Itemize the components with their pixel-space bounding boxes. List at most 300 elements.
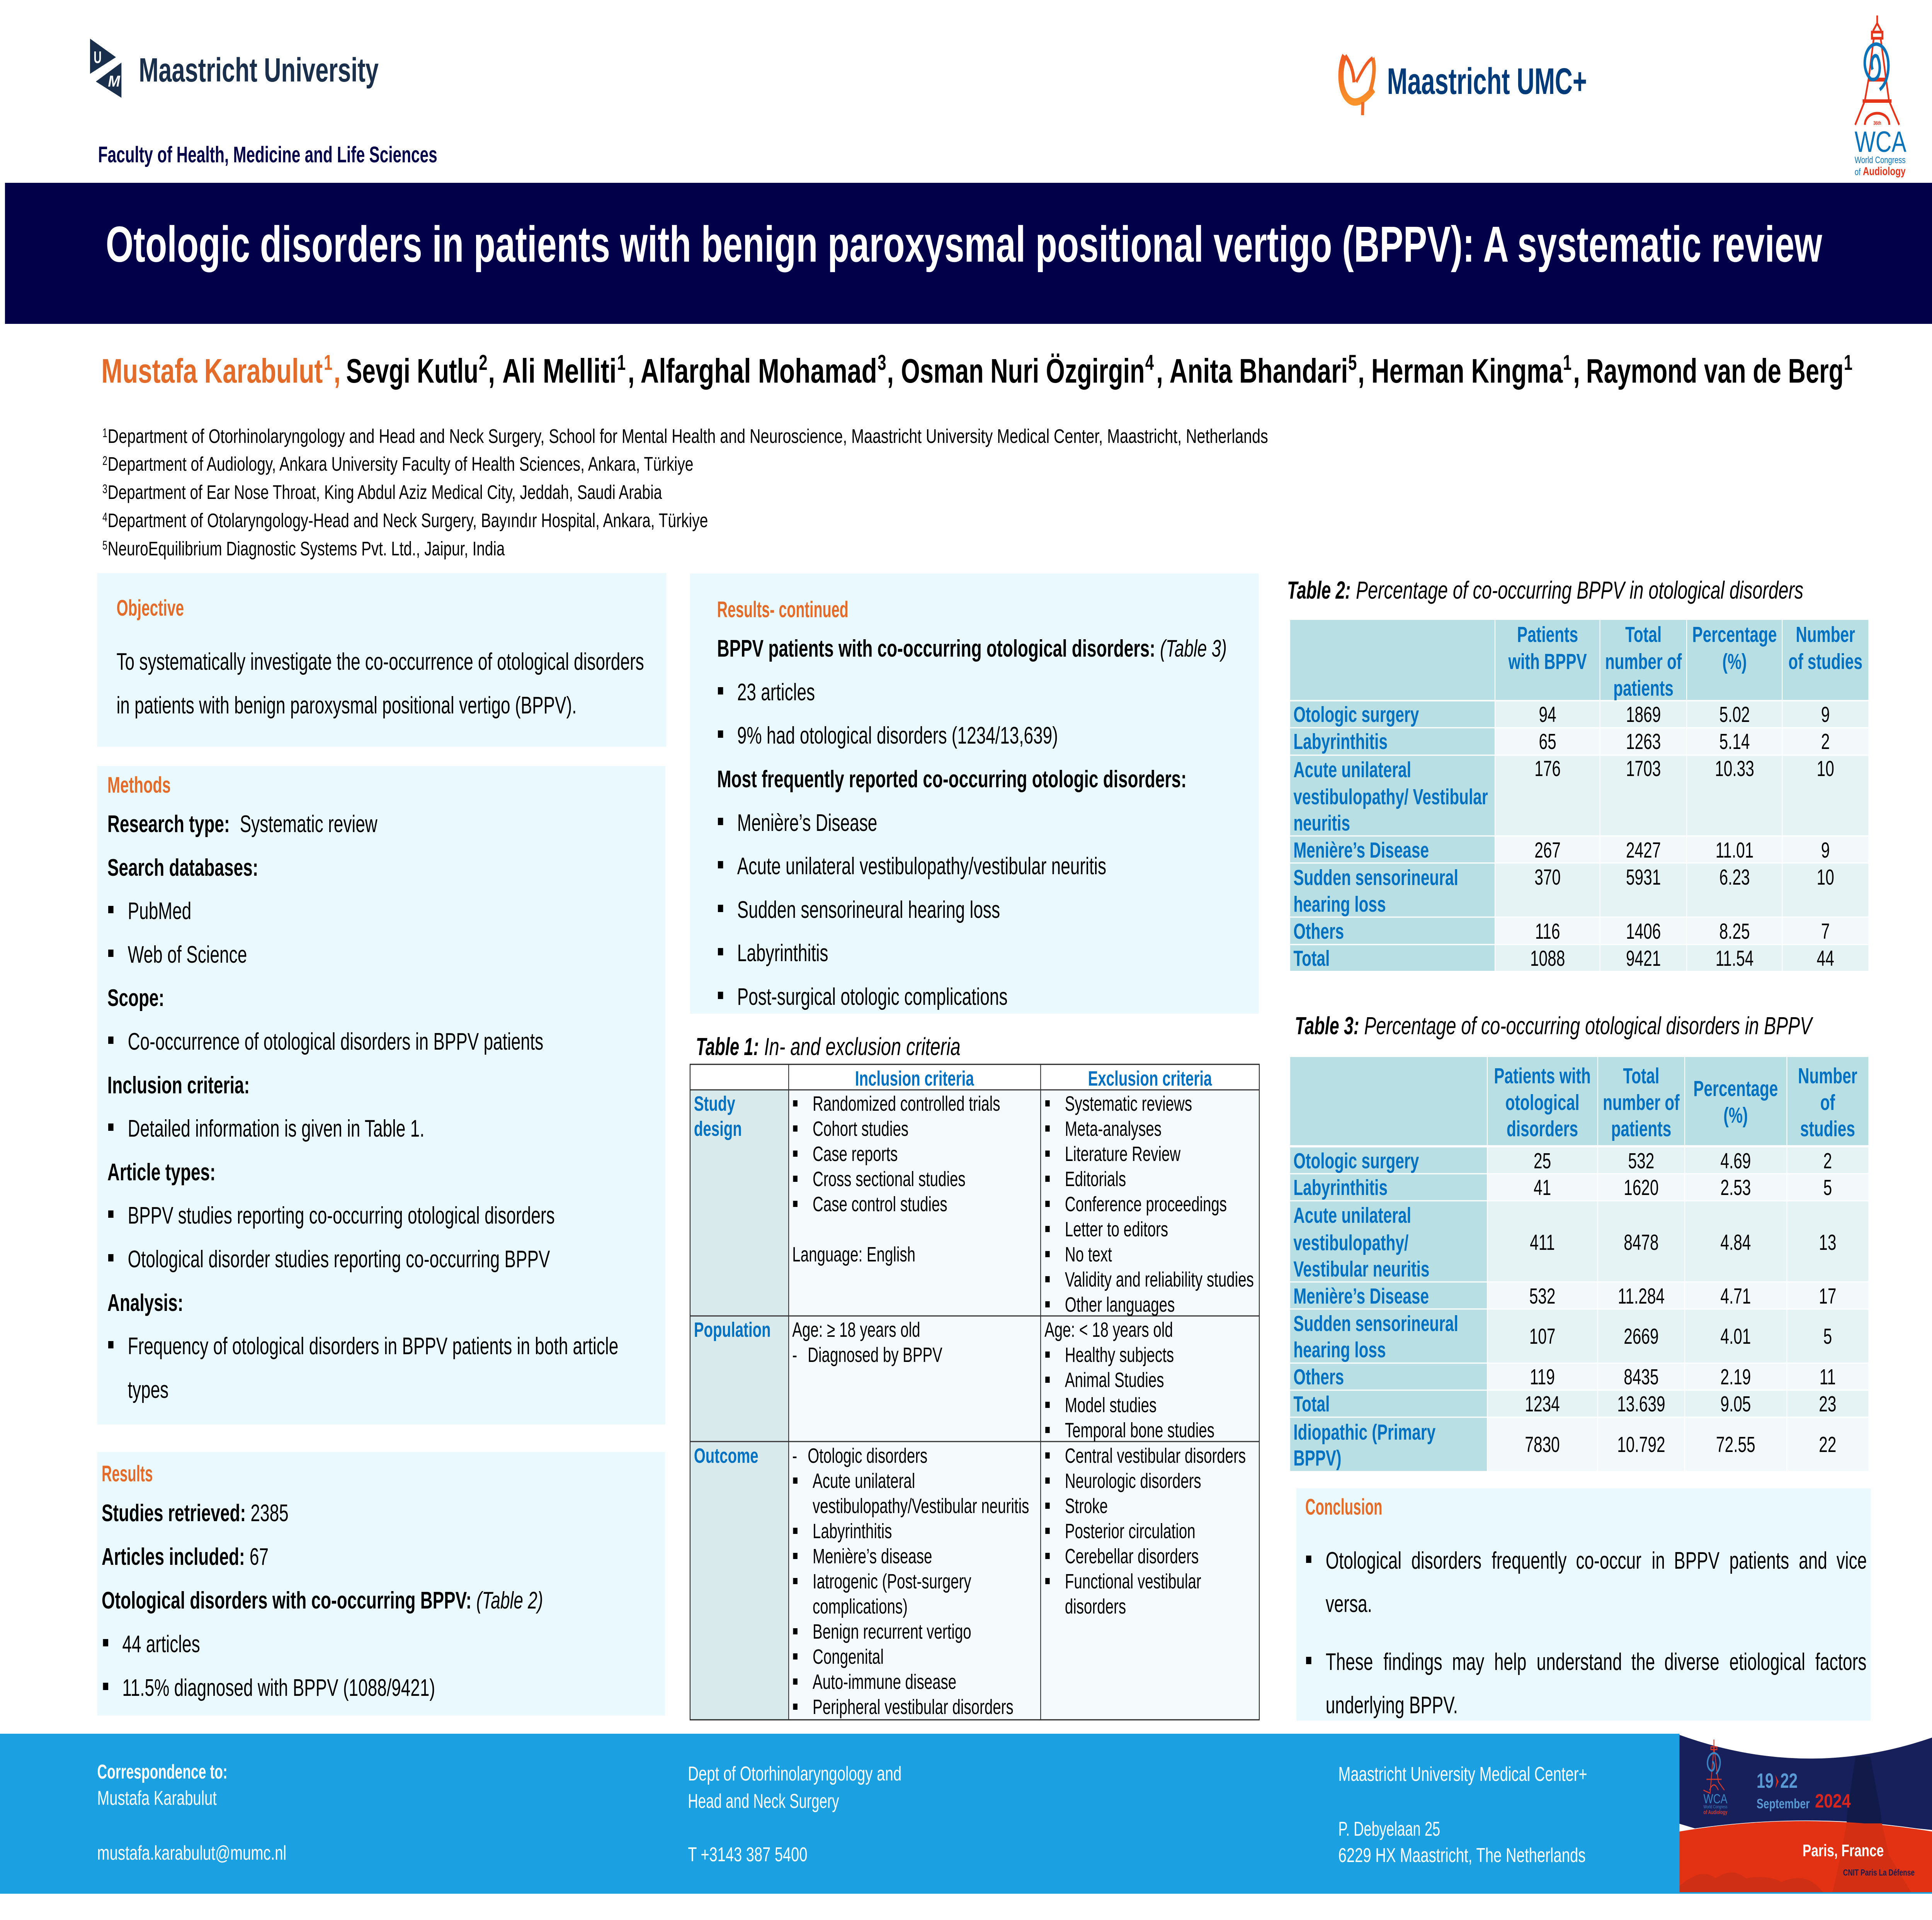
table 1 row: study design: Meta-analyses <box>1065 1117 1162 1140</box>
table 1 row: study design: Study <box>694 1092 735 1115</box>
table 2 header: Total <box>1625 622 1662 647</box>
table 2 rows: 2427 <box>1626 838 1661 863</box>
text: methods list: Research type: <box>107 811 230 837</box>
table 1 row: outcome: Posterior circulation <box>1065 1520 1196 1543</box>
text: methods list: PubMed <box>128 898 191 924</box>
table 1 row: study design: Literature Review <box>1065 1142 1180 1166</box>
table 2 rows: 8.25 <box>1719 919 1750 944</box>
table 2 rows: 176 <box>1534 756 1561 781</box>
text: results list: 11.5% diagnosed with BPPV (1088/9421) <box>122 1675 435 1701</box>
footer: correspondence <box>97 1760 286 1864</box>
table 1 row: outcome: Otologic disorders <box>808 1444 927 1467</box>
authors: Anita Bhandari <box>1170 352 1348 390</box>
table 2 rows: 65 <box>1539 729 1556 754</box>
affiliations: 5 <box>102 538 107 552</box>
authors: Alfarghal Mohamad <box>641 352 877 390</box>
table 1 row: outcome: Auto-immune disease <box>813 1670 956 1694</box>
footer: correspondence: Mustafa Karabulut <box>97 1787 217 1809</box>
table 2 rows: 9 <box>1821 702 1830 727</box>
table 2 rows: 7 <box>1821 919 1830 944</box>
table 1 header row: Inclusion criteria <box>855 1067 974 1090</box>
table 3 rows: Acute unilateral <box>1293 1203 1411 1228</box>
text: results list <box>102 1500 543 1701</box>
table 3 rows: 8435 <box>1624 1365 1659 1389</box>
text: results continued list: Post-surgical otologic complications <box>737 984 1008 1010</box>
text: results list: Otological disorders with co-occurring BPPV: (Table 2) <box>102 1587 543 1614</box>
mini logo: WCA <box>1703 1740 1728 1815</box>
text: conclusion bullets: frequently <box>1492 1547 1567 1574</box>
table 3 rows: Others <box>1293 1365 1344 1389</box>
text: conclusion bullets: the <box>1631 1649 1655 1675</box>
table 2 rows: vestibulopathy/ Vestibular <box>1293 785 1488 809</box>
text: results list: Studies retrieved: 2385 <box>102 1500 289 1527</box>
table 2 rows: Otologic surgery <box>1293 702 1419 727</box>
table 2 rows: neuritis <box>1293 811 1350 836</box>
table 1 row: study design: design <box>694 1117 742 1140</box>
table 3 header: Percentage <box>1693 1076 1778 1101</box>
table 2 header: of studies <box>1788 649 1862 674</box>
table 3 header: number of <box>1603 1090 1680 1115</box>
table 1 row: study design: Validity and reliability studies <box>1065 1268 1254 1291</box>
table 1 row: outcome: Labyrinthitis <box>813 1520 892 1543</box>
panel: objective <box>97 573 667 747</box>
text: conclusion bullets: diverse <box>1664 1649 1719 1675</box>
table 1 header row: Exclusion criteria <box>1088 1067 1212 1090</box>
table 3 rows: 25 <box>1534 1149 1551 1173</box>
authors: 2 <box>479 351 488 375</box>
table 3 header: Total <box>1623 1064 1659 1088</box>
table 1 row: outcome: complications) <box>813 1595 908 1618</box>
text: conclusion bullets: findings <box>1383 1649 1442 1675</box>
table 1 row: study design <box>694 1092 1254 1316</box>
table 2 header: (%) <box>1722 649 1747 674</box>
table 2 header <box>1508 622 1862 701</box>
authors: , <box>628 352 634 390</box>
congress location: CNIT Paris La Défense <box>1843 1868 1915 1878</box>
table 2: co-occurring BPPV in otological disorders <box>1290 620 1868 971</box>
table 3 header: (%) <box>1723 1103 1748 1128</box>
table 2 header: patients <box>1613 676 1673 701</box>
table 3 rows: Otologic surgery <box>1293 1149 1419 1173</box>
table 3 rows: 2.53 <box>1720 1175 1751 1200</box>
table 1 row: study design: Randomized controlled trials <box>813 1092 1000 1115</box>
table 2 rows: 94 <box>1539 702 1556 727</box>
table 1 row: population: Animal Studies <box>1065 1369 1164 1392</box>
table 3 header: of <box>1820 1090 1835 1115</box>
text: conclusion bullets: BPPV <box>1674 1547 1719 1574</box>
table 1 row: population: Population <box>694 1318 771 1341</box>
panel: conclusion <box>1296 1488 1871 1721</box>
text: results continued list: Menière’s Disease <box>737 810 877 836</box>
text: conclusion bullets: disorders <box>1411 1547 1481 1574</box>
footer: department: Dept of Otorhinolaryngology and <box>688 1762 901 1785</box>
footer: address: 6229 HX Maastricht, The Netherlands <box>1338 1844 1585 1867</box>
table 3 rows: 5 <box>1823 1175 1832 1200</box>
table 1: inclusion and exclusion criteria <box>690 1064 1259 1720</box>
table 2 caption: Table 2: <box>1287 576 1351 604</box>
text: conclusion bullets: factors <box>1815 1649 1866 1675</box>
text: results continued list <box>717 635 1227 1010</box>
table 1 row: outcome: vestibulopathy/Vestibular neuritis <box>813 1494 1029 1518</box>
logo: Maastricht University: U <box>94 48 102 67</box>
table 1 row: outcome: Congenital <box>813 1645 884 1668</box>
table 2 rows: 116 <box>1535 919 1560 944</box>
table 3 rows <box>1293 1149 1836 1471</box>
table 3 rows: 72.55 <box>1716 1432 1755 1457</box>
table 2 rows: 1703 <box>1626 756 1661 781</box>
authors: 1 <box>1563 351 1571 375</box>
text: results continued list: 23 articles <box>737 679 815 706</box>
table 1 row: outcome: Peripheral vestibular disorders <box>813 1695 1014 1719</box>
text: conclusion bullets: co-occur <box>1576 1547 1641 1574</box>
logo: World Congress of Audiology: Audiology <box>1863 164 1906 178</box>
table 2 rows: hearing loss <box>1293 892 1386 917</box>
table 1 row: study design: Editorials <box>1065 1168 1126 1191</box>
table 3 rows: 4.01 <box>1720 1324 1751 1349</box>
table 1 row: outcome: Central vestibular disorders <box>1065 1444 1246 1467</box>
table 3 rows: 17 <box>1819 1284 1836 1309</box>
authors <box>101 351 1852 390</box>
table 3 rows: 119 <box>1530 1365 1555 1389</box>
logo: Maastricht University <box>90 39 379 98</box>
table 3 rows: 2.19 <box>1720 1365 1751 1389</box>
table 1 row: population: Age: < 18 years old <box>1044 1318 1173 1341</box>
heading: objective: Objective <box>116 595 184 621</box>
table 1 row: study design: Other languages <box>1065 1293 1175 1316</box>
authors: 1 <box>1844 351 1852 375</box>
table 2 rows: Sudden sensorineural <box>1293 865 1458 890</box>
table 2 rows: 44 <box>1817 946 1834 971</box>
logo: Maastricht University: Maastricht University <box>139 52 379 89</box>
logo: World Congress of Audiology: WCA <box>1855 125 1906 158</box>
table 2 rows: 9421 <box>1626 946 1661 971</box>
table 1 row: outcome: Stroke <box>1065 1494 1108 1518</box>
text: methods list: Otological disorder studies reporting co-occurring BPPV <box>128 1246 550 1273</box>
table 2 rows: 10.33 <box>1715 756 1754 781</box>
table 2 header: Patients <box>1517 622 1578 647</box>
title banner <box>5 183 1932 324</box>
table 2 rows: 5931 <box>1626 865 1661 890</box>
table 2 rows: 6.23 <box>1719 865 1750 890</box>
affiliations: 1 <box>102 426 107 440</box>
logo: World Congress of Audiology: 36th <box>1873 120 1881 126</box>
authors: Sevgi Kutlu <box>346 352 478 390</box>
authors: , <box>334 352 340 390</box>
text: conclusion bullets: vice <box>1837 1547 1867 1574</box>
table 2 rows: 11.54 <box>1716 946 1753 971</box>
authors: Raymond van de Berg <box>1586 352 1844 390</box>
text: conclusion bullets: patients <box>1729 1547 1789 1574</box>
table 3: co-occurring otological disorders in BPPV <box>1290 1057 1868 1471</box>
table 3 rows: 11.284 <box>1618 1284 1665 1309</box>
congress location <box>1803 1841 1915 1878</box>
text: methods list: Web of Science <box>128 941 247 968</box>
affiliations <box>102 426 1268 560</box>
table 1 row: outcome: - <box>792 1444 797 1467</box>
table 3 rows: BPPV) <box>1293 1446 1341 1471</box>
text: methods list: Analysis: <box>107 1290 183 1316</box>
text: conclusion bullets: Otological <box>1326 1547 1401 1574</box>
table 1 row: population: Diagnosed by BPPV <box>808 1343 942 1367</box>
table 3 rows: 5 <box>1823 1324 1832 1349</box>
authors: , <box>1573 352 1580 390</box>
footer: department: T +3143 387 5400 <box>688 1843 808 1866</box>
authors: Mustafa Karabulut <box>101 352 323 390</box>
table 1 row: population: Temporal bone studies <box>1065 1419 1214 1442</box>
table 2 rows: 267 <box>1534 838 1561 863</box>
panel: methods <box>97 766 665 1425</box>
heading: methods: Methods <box>107 772 171 798</box>
table 3 rows: 1234 <box>1525 1392 1560 1416</box>
table 3 rows: 1620 <box>1624 1175 1659 1200</box>
table 3 rows: 41 <box>1534 1175 1551 1200</box>
mini logo: WCA: WCA <box>1703 1792 1728 1806</box>
authors: 1 <box>324 351 332 375</box>
congress dates: 19 <box>1757 1769 1774 1792</box>
table 2 rows: 370 <box>1534 865 1561 890</box>
table 1 caption: In- and exclusion criteria <box>764 1033 961 1060</box>
table 1 row: population <box>694 1318 1214 1442</box>
text: conclusion bullets <box>1306 1547 1867 1719</box>
footer: congress banner <box>1679 1734 1932 1892</box>
authors: , <box>488 352 495 390</box>
text: methods list: Inclusion criteria: <box>107 1072 250 1099</box>
table 2 rows: 1406 <box>1626 919 1661 944</box>
authors: , <box>1358 352 1365 390</box>
table 3 rows: Total <box>1293 1392 1330 1416</box>
table 3 rows: 9.05 <box>1720 1392 1751 1416</box>
affiliations: 4 <box>102 510 107 524</box>
table 3 header: Number <box>1798 1064 1857 1088</box>
table 1 row: study design: No text <box>1065 1243 1112 1266</box>
table 3 rows: Menière’s Disease <box>1293 1284 1429 1309</box>
affiliations: Department of Ear Nose Throat, King Abdul Aziz Medical City, Jeddah, Saudi Arabia <box>108 482 662 504</box>
text: methods list <box>107 811 618 1403</box>
table 3 rows: 22 <box>1819 1432 1836 1457</box>
table 1 caption: Table 1: <box>696 1033 759 1060</box>
faculty name: Faculty of Health, Medicine and Life Sciences <box>98 142 437 167</box>
table 2 header: Number <box>1796 622 1855 647</box>
table 3 caption: Table 3: <box>1295 1012 1359 1040</box>
text: conclusion bullets: versa. <box>1326 1591 1372 1617</box>
table 1 row: population: Model studies <box>1065 1394 1156 1417</box>
authors: 1 <box>617 351 626 375</box>
authors: 4 <box>1145 351 1154 375</box>
footer band <box>0 1734 1932 1894</box>
table 3 rows: 4.71 <box>1720 1284 1751 1309</box>
congress dates: September <box>1757 1796 1810 1811</box>
table 2 rows: 11.01 <box>1716 838 1753 863</box>
text: results continued list: 9% had otological disorders (1234/13,639) <box>737 722 1058 749</box>
footer: address <box>1338 1763 1587 1867</box>
text: conclusion bullets: These <box>1326 1649 1373 1675</box>
title banner: Otologic disorders in patients with benign paroxysmal positional vertigo (BPPV): A systematic review <box>106 216 1822 273</box>
affiliations: Department of Otolaryngology-Head and Neck Surgery, Bayındır Hospital, Ankara, Türkiye <box>108 510 708 532</box>
table 1 row: outcome: disorders <box>1065 1595 1126 1618</box>
text: results continued list: BPPV patients with co-occurring otological disorders: (Table 3) <box>717 635 1227 662</box>
logo: Maastricht University: M <box>108 72 121 90</box>
text: methods list: BPPV studies reporting co-occurring otological disorders <box>128 1202 555 1229</box>
table 3 rows: 13 <box>1819 1230 1836 1255</box>
table 3 rows: 23 <box>1819 1392 1836 1416</box>
table 1 row: outcome: Functional vestibular <box>1065 1570 1201 1593</box>
table 3 header: otological <box>1505 1090 1579 1115</box>
affiliations: Department of Audiology, Ankara University Faculty of Health Sciences, Ankara, Türkiye <box>108 453 693 475</box>
text: results list: Articles included: 67 <box>102 1544 269 1570</box>
table 3 rows: 2 <box>1823 1149 1832 1173</box>
table 2 rows: 5.14 <box>1719 729 1750 754</box>
table 2 header: Percentage <box>1692 622 1777 647</box>
affiliations: 3 <box>102 482 107 496</box>
text: conclusion bullets: understand <box>1537 1649 1622 1675</box>
congress location: Paris, France <box>1803 1841 1884 1860</box>
table 1 row: study design: Language: English <box>792 1243 915 1266</box>
text: conclusion bullets: and <box>1799 1547 1827 1574</box>
table 1 row: population: Age: ≥ 18 years old <box>792 1318 920 1341</box>
congress dates <box>1757 1769 1851 1812</box>
authors: Ali Melliti <box>502 352 617 390</box>
text: results continued list: Sudden sensorineural hearing loss <box>737 897 1000 923</box>
table 3 header: patients <box>1611 1117 1671 1141</box>
table 1 header row <box>855 1067 1212 1090</box>
table 1 row: population: - <box>792 1343 797 1367</box>
table 2 rows: 1869 <box>1626 702 1661 727</box>
heading: conclusion: Conclusion <box>1305 1494 1383 1520</box>
table 2 rows <box>1293 702 1834 971</box>
text: objective statement: in patients with benign paroxysmal positional vertigo (BPPV). <box>116 692 577 719</box>
footer: address: P. Debyelaan 25 <box>1338 1818 1440 1840</box>
congress dates: 2024 <box>1815 1791 1851 1812</box>
table 3 rows: Labyrinthitis <box>1293 1175 1388 1200</box>
table 3 rows: Idiopathic (Primary <box>1293 1420 1436 1445</box>
logo: World Congress of Audiology: of <box>1855 167 1861 177</box>
table 3 rows: 107 <box>1529 1324 1555 1349</box>
table 3 rows: 4.84 <box>1720 1230 1751 1255</box>
table 2 rows: Labyrinthitis <box>1293 729 1388 754</box>
text: results list: 44 articles <box>122 1631 200 1658</box>
authors: , <box>1156 352 1163 390</box>
table 2 rows: Total <box>1293 946 1330 971</box>
table 2 rows: Others <box>1293 919 1344 944</box>
table 1 row: outcome: Benign recurrent vertigo <box>813 1620 971 1643</box>
panel: results continued <box>690 574 1259 1014</box>
table 2 rows: 10 <box>1817 756 1834 781</box>
table 2 header: with BPPV <box>1508 649 1587 674</box>
table 2 rows: 5.02 <box>1719 702 1750 727</box>
table 1 row: study design: Case control studies <box>813 1193 947 1216</box>
table 3 header: studies <box>1800 1117 1855 1141</box>
table 1 row: study design: Cross sectional studies <box>813 1168 966 1191</box>
footer: correspondence: Correspondence to: <box>97 1760 228 1783</box>
table 2 rows: 10 <box>1817 865 1834 890</box>
table 2 rows: 2 <box>1821 729 1830 754</box>
table 3 caption: Percentage of co-occurring otological disorders in BPPV <box>1364 1012 1813 1040</box>
text: results continued list: Most frequently reported co-occurring otologic disorders: <box>717 766 1187 793</box>
table 3 header <box>1494 1064 1857 1141</box>
table 3 rows: Sudden sensorineural <box>1293 1311 1458 1336</box>
text: conclusion bullets: underlying BPPV. <box>1326 1692 1458 1719</box>
text: methods list: Detailed information is given in Table 1. <box>128 1115 425 1142</box>
authors: , <box>887 352 894 390</box>
footer: department: Head and Neck Surgery <box>688 1790 839 1813</box>
table 3 rows: 532 <box>1628 1149 1654 1173</box>
text: methods list: Search databases: <box>107 854 258 881</box>
affiliations: NeuroEquilibrium Diagnostic Systems Pvt. Ltd., Jaipur, India <box>108 538 505 560</box>
table 2 rows: 9 <box>1821 838 1830 863</box>
table 1 row: outcome: Neurologic disorders <box>1065 1469 1201 1493</box>
text: methods list: Systematic review <box>240 811 378 837</box>
affiliations: Department of Otorhinolaryngology and Head and Neck Surgery, School for Mental Health and Neuroscience, Maastricht University Medical Center, Maastricht, Netherlands <box>108 426 1268 448</box>
table 3 header: disorders <box>1507 1117 1578 1141</box>
table 3 rows: 13.639 <box>1617 1392 1665 1416</box>
text: results continued list: Acute unilateral vestibulopathy/vestibular neuritis <box>737 853 1106 880</box>
table 1 row: outcome <box>694 1444 1246 1719</box>
text: methods list: Frequency of otological disorders in BPPV patients in both article <box>128 1333 618 1360</box>
congress dates: 22 <box>1780 1769 1798 1792</box>
affiliations: 2 <box>102 454 107 468</box>
footer: address: Maastricht University Medical Center+ <box>1338 1763 1587 1786</box>
authors: 5 <box>1348 351 1357 375</box>
table 3 header: Patients with <box>1494 1064 1591 1088</box>
table 1 row: outcome: Outcome <box>694 1444 759 1467</box>
footer: department <box>688 1762 901 1866</box>
table 1 row: population: Healthy subjects <box>1065 1343 1174 1367</box>
text: conclusion bullets: in <box>1652 1547 1665 1574</box>
table 2 rows: Acute unilateral <box>1293 757 1411 782</box>
table 3 rows: 11 <box>1820 1365 1836 1389</box>
logo: World Congress of Audiology: World Congress <box>1855 155 1906 165</box>
text: methods list: types <box>128 1377 168 1403</box>
text: methods list: Scope: <box>107 985 164 1011</box>
table 1 row: outcome: Menière’s disease <box>813 1545 932 1568</box>
table 3 rows: 532 <box>1529 1284 1555 1309</box>
authors: 3 <box>878 351 886 375</box>
table 3 rows: 411 <box>1530 1230 1555 1255</box>
heading: results: Results <box>102 1461 153 1486</box>
table 1 row: outcome: Cerebellar disorders <box>1065 1545 1199 1568</box>
table 2 rows: Menière’s Disease <box>1293 838 1429 863</box>
table 1 row: study design: Cohort studies <box>813 1117 908 1140</box>
text: conclusion bullets: etiological <box>1729 1649 1805 1675</box>
logo: World Congress of Audiology <box>1855 15 1906 178</box>
authors: Herman Kingma <box>1371 352 1563 390</box>
logo: Maastricht UMC+: Maastricht UMC+ <box>1387 61 1587 102</box>
mini logo: WCA: of Audiology <box>1703 1809 1728 1815</box>
text: objective statement: To systematically investigate the co-occurrence of otological disorders <box>116 649 644 675</box>
text: methods list: Co-occurrence of otological disorders in BPPV patients <box>128 1028 543 1055</box>
table 3 rows: 7830 <box>1525 1432 1560 1457</box>
text: results continued list: Labyrinthitis <box>737 940 828 967</box>
text: objective statement <box>116 649 644 719</box>
table 3 rows: hearing loss <box>1293 1338 1386 1362</box>
table 3 rows: Vestibular neuritis <box>1293 1257 1429 1282</box>
table 1 row: study design: Conference proceedings <box>1065 1193 1227 1216</box>
table 2 rows: 1263 <box>1626 729 1661 754</box>
table 1 row: study design: Letter to editors <box>1065 1218 1168 1241</box>
text: conclusion bullets: may <box>1452 1649 1484 1675</box>
table 3 rows: vestibulopathy/ <box>1293 1231 1408 1255</box>
table 3 rows: 2669 <box>1624 1324 1659 1349</box>
table 2 caption: Percentage of co-occurring BPPV in otological disorders <box>1356 576 1803 604</box>
table 1 row: study design: Case reports <box>813 1142 898 1166</box>
table 3 rows: 4.69 <box>1720 1149 1751 1173</box>
footer: correspondence: mustafa.karabulut@mumc.nl <box>97 1842 286 1864</box>
text: methods list: Article types: <box>107 1159 216 1186</box>
mini logo: WCA: World Congress <box>1703 1805 1727 1809</box>
table 2 rows: 1088 <box>1530 946 1565 971</box>
table 2 header: number of <box>1605 649 1682 674</box>
table 1 row: outcome: Acute unilateral <box>813 1469 915 1493</box>
